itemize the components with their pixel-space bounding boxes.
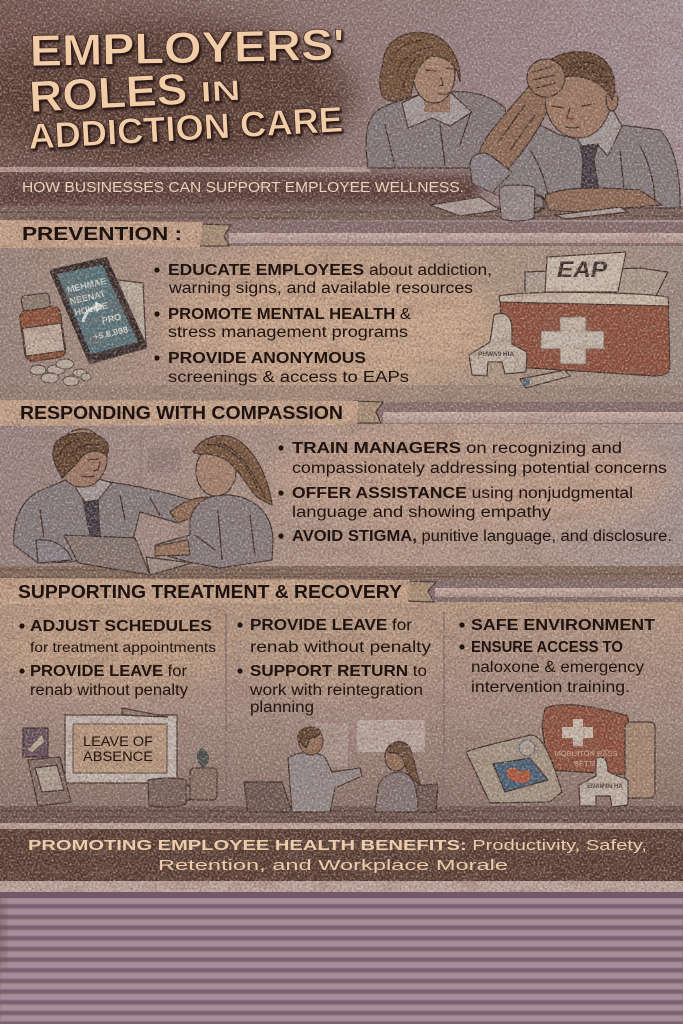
text block: prevention bullets: PROMOTE MENTAL HEALTH & — [168, 306, 412, 323]
background: treatment panel — [0, 602, 683, 824]
text block: prevention bullets: PROVIDE ANONYMOUS — [168, 350, 366, 367]
text block: compassion bullets: compassionately addressing potential concerns — [292, 460, 667, 477]
illustration: emergency kit: ENAM4N HA — [587, 784, 623, 790]
illustration: emergency kit: MOBUITON RASS — [555, 749, 617, 758]
illustration: EAP first aid bag — [499, 252, 670, 376]
ribbon: prevention — [0, 220, 231, 248]
column 3: safe environment: intervention training. — [471, 679, 630, 696]
column 2: leave and return: PROVIDE LEAVE for — [250, 617, 412, 634]
illustration: worried colleagues at desk — [366, 32, 680, 221]
text block: compassion bullets: AVOID STIGMA, punitive language, and disclosure. — [292, 528, 672, 545]
background: header — [0, 0, 683, 222]
text block: compassion bullets: OFFER ASSISTANCE using nonjudgmental — [292, 485, 633, 502]
illustration: manager comforting employee — [14, 429, 273, 575]
title: IN — [200, 75, 241, 109]
laptop — [64, 535, 192, 575]
column 2: leave and return: planning — [250, 699, 314, 716]
background: striped lower panel — [0, 891, 683, 1024]
illustration: phone with helpline: MEHMAE — [66, 276, 107, 295]
text block: prevention bullets: EDUCATE EMPLOYEES about addiction, — [168, 262, 492, 279]
section strip: prevention — [229, 233, 683, 243]
column 1: schedules and leave: ADJUST SCHEDULES — [30, 618, 212, 635]
text block: prevention bullets — [154, 262, 492, 386]
column 3: safe environment: ENSURE ACCESS TO — [471, 639, 623, 656]
illustration: pill bottle — [17, 291, 67, 362]
footer message: PROMOTING EMPLOYEE HEALTH BENEFITS: Productivity, Safety, — [28, 837, 647, 854]
text block: prevention bullets: warning signs, and available resources — [168, 280, 473, 297]
illustration: leave of absence monitor — [23, 708, 217, 807]
section strip: treatment — [435, 588, 683, 597]
man — [14, 429, 210, 563]
illustration: phone with helpline: HOLINE — [73, 300, 109, 318]
illustration: phone with helpline: NEENAT — [69, 288, 107, 306]
column 2: leave and return: renab without penalty — [250, 639, 431, 656]
illustration: naloxone device: PHWA9 HIA — [478, 351, 514, 358]
subtitle: HOW BUSINESSES CAN SUPPORT EMPLOYEE WELLNESS. — [22, 180, 464, 196]
ribbon: compassion — [0, 400, 383, 426]
illustration: emergency kit — [466, 705, 655, 807]
desk items — [430, 185, 628, 221]
section strip: compassion — [383, 412, 683, 423]
text block: prevention bullets: stress management programs — [168, 324, 408, 341]
monitor label: leave of absence: LEAVE OF — [83, 734, 153, 749]
title — [27, 20, 345, 157]
illustration: phone with helpline — [53, 260, 146, 361]
footer banner — [0, 823, 683, 892]
section heading: prevention: PREVENTION : — [22, 223, 182, 244]
column 1: schedules and leave — [19, 618, 216, 699]
column 1: schedules and leave: renab without penalty — [30, 682, 188, 699]
woman — [155, 436, 273, 568]
column 2: leave and return: work with reintegration — [249, 682, 423, 699]
background: prevention panel — [0, 246, 683, 402]
title: ADDICTION CARE — [27, 98, 344, 157]
section heading: treatment: SUPPORTING TREATMENT & RECOVERY — [18, 581, 403, 602]
ribbon: treatment — [0, 578, 436, 604]
background: compassion panel — [0, 424, 683, 580]
woman — [366, 32, 510, 168]
text block: compassion bullets: TRAIN MANAGERS on recognizing and — [292, 440, 622, 457]
column 3: safe environment: SAFE ENVIRONMENT — [471, 617, 656, 634]
wall details — [140, 430, 180, 500]
footer message: Retention, and Workplace Morale — [158, 857, 508, 874]
illustration: emergency kit: BETTE — [574, 759, 598, 768]
text block: compassion bullets — [278, 440, 672, 545]
illustration: phone with helpline: PRO — [101, 312, 122, 326]
illustration: pills — [30, 359, 91, 386]
column 1: schedules and leave: PROVIDE LEAVE for — [30, 663, 187, 680]
text block: compassion bullets: language and showing empathy — [292, 504, 551, 521]
illustration: phone with helpline: +5.8.998 — [92, 324, 129, 342]
text block: prevention bullets: screenings & access to EAPs — [168, 369, 409, 386]
column 1: schedules and leave: for treatment appointments — [30, 639, 216, 655]
monitor label: leave of absence: ABSENCE — [83, 749, 153, 764]
column 3: safe environment: naloxone & emergency — [471, 659, 644, 676]
man — [470, 52, 680, 212]
illustration: return to work meeting — [244, 720, 438, 812]
column 2: leave and return: SUPPORT RETURN to — [250, 663, 427, 680]
monitor label: leave of absence — [83, 734, 153, 764]
footer message — [28, 837, 647, 874]
column 2: leave and return — [237, 617, 431, 716]
title: EMPLOYERS' — [29, 20, 345, 76]
column 3: safe environment — [459, 617, 656, 696]
illustration: EAP first aid bag: EAP — [557, 257, 607, 282]
section heading: compassion: RESPONDING WITH COMPASSION — [20, 402, 343, 423]
title: ROLES — [28, 65, 188, 122]
illustration: naloxone device — [469, 313, 570, 388]
